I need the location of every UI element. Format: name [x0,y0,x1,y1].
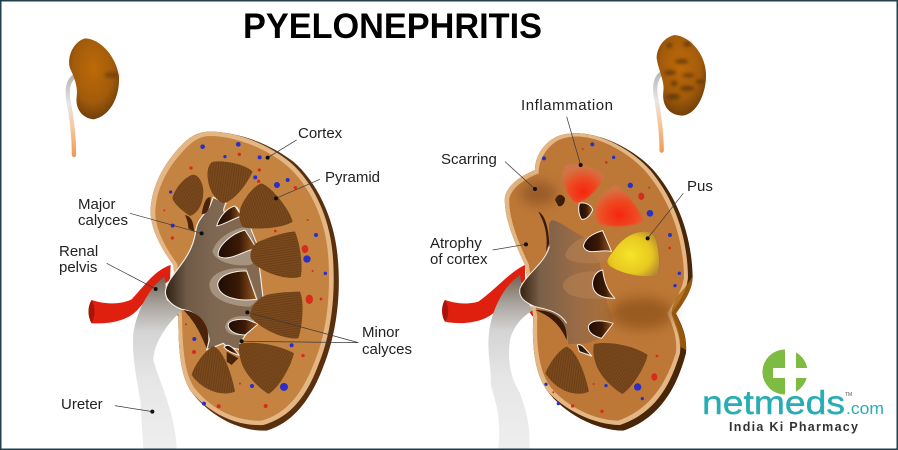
icon: healthy small kidney [68,38,119,155]
leader lines [493,117,683,250]
renal artery [442,265,535,323]
label: minor calyces: Minor [362,324,400,341]
panel: healthy kidney [89,132,358,449]
pyramids [172,161,303,394]
logo wordmark: netmeds [702,384,845,421]
label: scarring: Scarring [441,151,497,168]
calyces and pelvis [520,220,613,344]
blood vessels [169,142,327,406]
label: minor calyces: calyces [362,341,412,358]
label: renal pelvis: Renal [59,243,98,260]
label: renal pelvis: pelvis [59,259,97,276]
label: pyramid: Pyramid [325,169,380,186]
inflammation lower [595,185,644,226]
leader lines [107,140,358,414]
label: major calyces: calyces [78,212,128,229]
dark recesses [183,197,238,365]
title: PYELONEPHRITIS [243,7,542,46]
ureter [488,275,533,449]
logo tagline: India Ki Pharmacy [729,420,858,434]
calyx cavities [217,206,258,355]
calyces and pelvis [165,197,263,350]
logo: netmeds [702,348,884,434]
logo domain: .com [846,400,884,418]
label: pus: Pus [687,178,713,195]
scarring [520,181,557,205]
blood vessels [542,142,681,405]
logo cross icon [762,348,809,396]
kidney body [505,133,693,431]
ureter [133,277,182,449]
dark recesses [535,195,567,340]
icon: damaged small kidney [655,35,706,151]
label: ureter: Ureter [61,396,103,413]
label: atrophy of cortex: of cortex [430,251,488,268]
scar patch lower [610,297,673,329]
calyx cavities [577,203,615,356]
pyramids [545,343,648,394]
label: inflammation: Inflammation [521,97,613,114]
renal artery [89,265,181,323]
inflammation top [563,164,604,203]
pus [607,231,659,277]
label: cortex: Cortex [298,125,343,142]
kidney body [151,132,339,431]
logo trademark: TM [845,392,852,398]
label: major calyces: Major [78,196,116,213]
label: atrophy of cortex: Atrophy [430,235,482,252]
panel: infected kidney [442,117,693,449]
